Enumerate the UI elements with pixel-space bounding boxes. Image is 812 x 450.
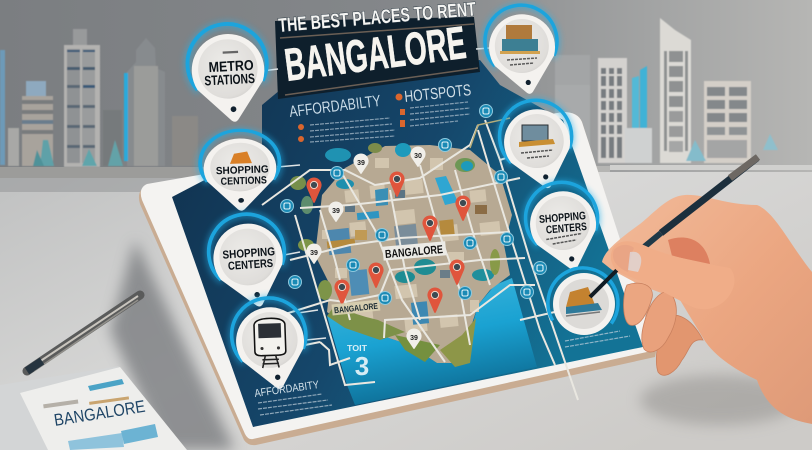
map: land — [315, 145, 512, 363]
pin: metro train — [225, 291, 316, 397]
flyer title: BANGALORE — [53, 397, 146, 430]
map: teal badges — [280, 104, 546, 304]
label: SHOPPING — [539, 210, 586, 226]
top 3 callout: TOIT — [347, 344, 367, 353]
thumb — [611, 241, 734, 309]
paper flyer: Bangalore — [0, 366, 187, 450]
pen on the desk — [27, 295, 140, 371]
stylus — [590, 157, 758, 297]
map: green and teal patches — [290, 143, 500, 367]
pin: shopping centers right — [518, 175, 609, 279]
label — [222, 246, 276, 273]
pin: shopping centers upper — [199, 129, 281, 212]
label: CENTERS — [545, 221, 587, 236]
pin: right top building — [479, 0, 566, 100]
heading: hotspots: HOTSPOTS — [404, 82, 472, 106]
label: SHOPPING — [222, 246, 275, 262]
hand back and index finger — [602, 195, 812, 424]
map: number markers: 39 — [332, 208, 340, 215]
heading: affordability — [288, 93, 395, 142]
map: roads — [262, 120, 585, 400]
background: desk surface — [0, 172, 812, 450]
caption: affordability: AFFORDABITY — [254, 379, 320, 400]
wall shelf — [0, 165, 812, 192]
pin: shopping centers upper: CENTIONS — [220, 175, 267, 188]
map: water — [327, 278, 537, 405]
caption lines under mall badge — [565, 331, 630, 347]
label: CENTERS — [228, 258, 274, 273]
finger: ring — [656, 315, 703, 375]
map: number markers — [306, 146, 426, 349]
map: number markers: 30 — [414, 153, 422, 160]
icon: shop — [230, 151, 252, 164]
finger: middle — [642, 292, 676, 352]
pin: shopping centers middle — [201, 206, 297, 316]
label — [203, 50, 255, 89]
map: buildings — [327, 176, 487, 325]
caption: affordability — [254, 379, 332, 415]
tablet shadow on desk — [110, 240, 235, 450]
top 3 callout — [347, 344, 369, 381]
icon: office — [519, 125, 555, 158]
icon: train — [254, 318, 286, 368]
background: grey wall — [0, 0, 812, 172]
title: Bangalore: BANGALORE — [282, 16, 469, 91]
map: number markers: 39 — [310, 250, 318, 257]
map label: Bangalore: BANGALORE — [385, 244, 444, 261]
map label: lower Bangalore: BANGALORE — [334, 301, 379, 315]
icon: building — [500, 25, 540, 65]
label — [539, 210, 588, 245]
connector lines — [262, 48, 490, 340]
finger: index lower — [624, 283, 652, 325]
badge: mall — [535, 255, 631, 351]
palm inner shadow — [668, 238, 710, 264]
cityscape: right skyline — [555, 18, 778, 163]
pin: right building — [492, 93, 583, 197]
cityscape: left skyline — [0, 29, 198, 167]
hand holding the stylus — [590, 157, 812, 425]
top 3 callout: 3 — [355, 351, 369, 381]
icon: mall building — [566, 287, 602, 316]
label: METRO — [208, 58, 254, 76]
desk shadow under hand — [640, 375, 800, 425]
map — [262, 104, 585, 400]
label: SHOPPING — [216, 164, 269, 177]
title block — [275, 0, 480, 99]
map: location pins — [306, 171, 471, 313]
map: number markers: 39 — [357, 160, 365, 167]
label: STATIONS — [204, 71, 255, 89]
thumb nail highlight — [613, 245, 634, 272]
pin: metro stations — [182, 19, 274, 127]
tablet screen — [172, 60, 643, 427]
tablet frame — [139, 112, 656, 445]
heading: hotspots — [396, 82, 472, 127]
title: banner — [275, 17, 480, 99]
heading: affordability: AFFORDABILTY — [288, 93, 382, 121]
map: number markers: 39 — [410, 335, 418, 342]
